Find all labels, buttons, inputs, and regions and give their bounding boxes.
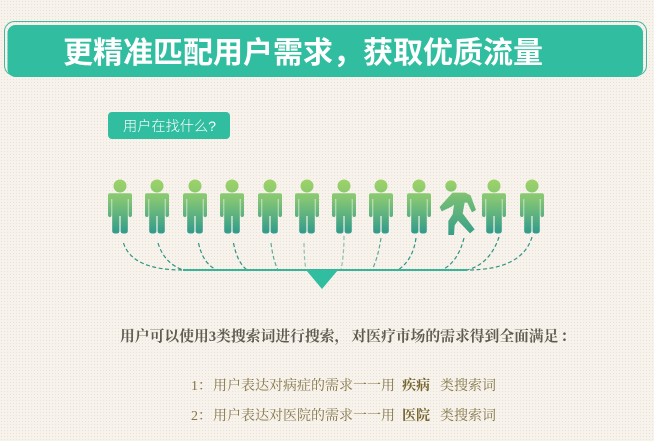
- summary sentence: 用户可以使用3类搜索词进行搜索，对医疗市场的需求得到全面满足：: [120, 327, 575, 346]
- pointer triangle: [306, 270, 338, 289]
- list item 2: 类搜索词: [440, 407, 496, 424]
- question tag: [108, 112, 230, 139]
- list item 1: 疾病: [402, 378, 430, 394]
- list item 2: [191, 405, 496, 425]
- list item 1: 用户表达对病症的需求一一用: [213, 375, 395, 395]
- title banner: [4, 22, 646, 77]
- list item 1: 类搜索词: [440, 377, 496, 394]
- list item 2: 医院: [402, 407, 430, 424]
- list item 2: 用户表达对医院的需求一一用: [213, 405, 395, 425]
- converging line: [183, 269, 467, 271]
- list item 1: 1：: [191, 379, 212, 394]
- title text: 更精准匹配用户需求，获取优质流量: [63, 37, 543, 70]
- question tag: 用户在找什么?: [123, 119, 216, 135]
- row of people icons: [108, 180, 544, 235]
- list item 2: 2：: [191, 409, 212, 424]
- icon: walking person: [440, 180, 476, 235]
- list item 1: [191, 375, 496, 395]
- dashed connector lines: [124, 236, 532, 270]
